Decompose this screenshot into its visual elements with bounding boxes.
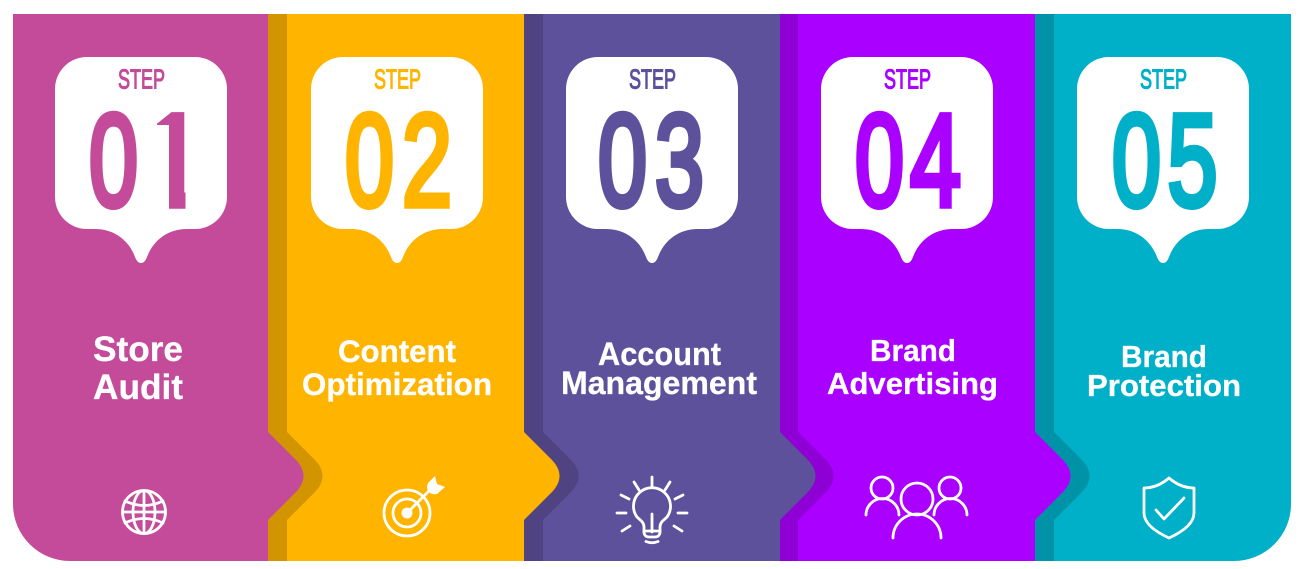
icon: target with arrow	[384, 476, 445, 536]
title: Brand Protection: Brand	[1121, 339, 1207, 374]
panel: step 03 Account Management	[524, 14, 816, 561]
badge: step 03: 0	[598, 86, 647, 234]
panel: step 05 Brand Protection	[1035, 14, 1291, 561]
title: Account Management: Management	[561, 365, 757, 401]
title: Content Optimization	[302, 333, 492, 402]
title: Brand Advertising: Advertising	[827, 366, 998, 401]
title: Brand Protection: Protection	[1087, 368, 1241, 403]
badge: step 05: STEP	[1140, 64, 1187, 94]
badge: step 02: 0	[345, 86, 394, 234]
badge: step 01: 1	[143, 86, 206, 234]
title: Account Management	[561, 336, 757, 401]
title: Brand Advertising	[827, 333, 998, 401]
panel: step 01 Store Audit	[13, 14, 304, 561]
badge: step 03	[566, 57, 738, 263]
badge: step 04	[821, 57, 993, 263]
icon: three people	[866, 477, 967, 538]
badge: step 02	[311, 57, 483, 263]
icon: globe	[122, 490, 166, 534]
title: Brand Protection	[1087, 339, 1241, 403]
badge: step 04: STEP	[884, 64, 931, 94]
badge: step 04: 0	[855, 86, 904, 234]
badge: step 02: STEP	[374, 64, 421, 94]
icon: shield with check	[1144, 478, 1194, 538]
badge: step 01: STEP	[118, 64, 165, 94]
title: Brand Advertising: Brand	[870, 333, 956, 368]
title: Store Audit	[93, 330, 183, 407]
badge: step 01: 0	[89, 86, 138, 234]
panel: step 02 Content Optimization	[268, 14, 560, 561]
title: Store Audit: Store	[93, 330, 183, 369]
title: Account Management: Account	[598, 336, 721, 372]
badge: step 01	[55, 57, 227, 263]
badge: step 03: 3	[655, 86, 704, 234]
icon: light bulb	[617, 477, 687, 543]
badge: step 05: 0	[1112, 86, 1161, 234]
panel: step 04 Brand Advertising	[780, 14, 1070, 561]
title: Content Optimization: Content	[338, 333, 456, 369]
badge: step 05	[1077, 57, 1249, 263]
badge: step 04: 4	[910, 86, 961, 234]
title: Store Audit: Audit	[93, 368, 183, 407]
badge: step 05: 5	[1168, 86, 1218, 234]
badge: step 02: 2	[402, 86, 452, 234]
title: Content Optimization: Optimization	[302, 366, 492, 402]
badge: step 03: STEP	[629, 64, 676, 94]
